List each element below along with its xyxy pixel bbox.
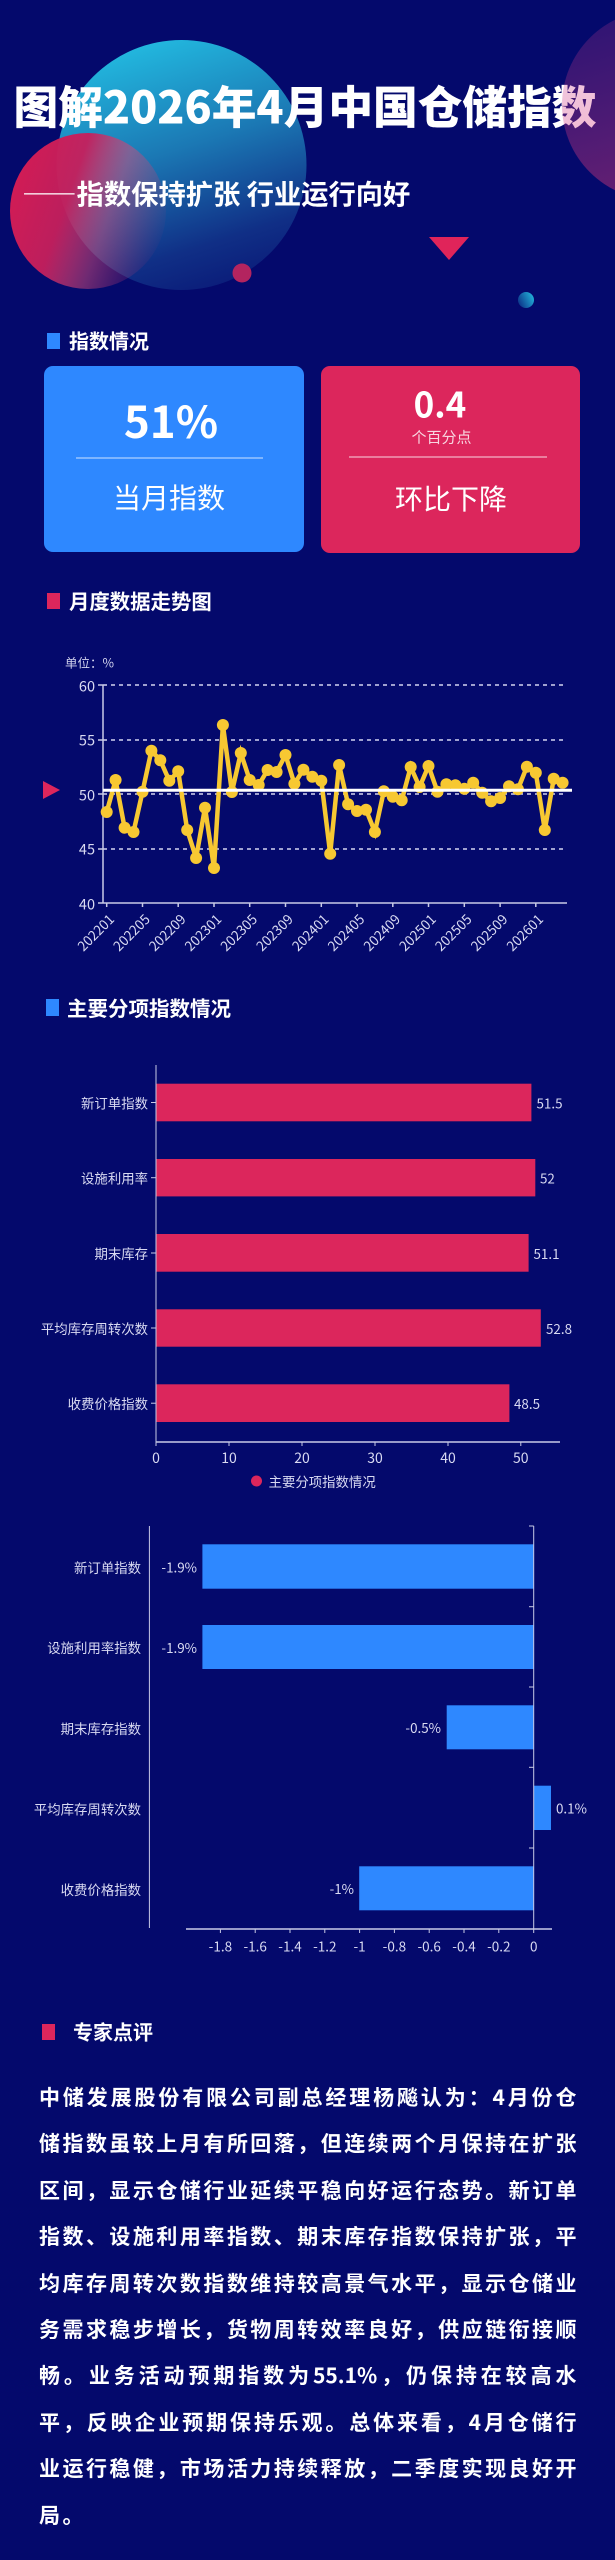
x axis labels: 10 [221,1448,237,1468]
value labels [161,1557,587,1898]
x axis labels: -1.8 [209,1936,232,1956]
text block: expert comment: 中储发展股份有限公司副总经理杨飚认为：4月份仓 [39,2082,576,2112]
x axis labels: 202401 [287,909,333,955]
x axis labels: 50 [513,1448,529,1468]
header decoration: large blue circle [56,40,306,290]
value labels [514,1092,572,1413]
x axis labels: 202601 [501,909,547,955]
card value: 51%: 51% [124,387,218,451]
bars [156,1084,541,1422]
category labels: 平均库存周转次数 [41,1318,149,1338]
card value: 0.4: 0.4 [414,378,466,428]
section heading: index overview: 指数情况 [69,326,149,354]
line chart: monthly index trend [43,652,572,955]
value labels: 51.5 [536,1092,563,1112]
value labels: -0.5% [405,1717,441,1737]
text block: expert comment: 均库存周转次数指数维持较高景气水平，显示仓储业 [39,2268,576,2298]
value labels: -1.9% [161,1637,197,1657]
text block: expert comment: 储指数虽较上月有所回落，但连续两个月保持在扩张 [39,2128,576,2158]
x axis labels: 202505 [430,909,476,955]
value labels: -1% [330,1878,354,1898]
x axis labels: 202405 [322,909,368,955]
data points [101,719,569,874]
header decoration: purple circle at right edge [562,10,615,200]
x axis labels: 30 [367,1448,383,1468]
card: current month index [44,366,304,552]
text block: expert comment: 平，反映企业预期保持乐观。总体来看，4月仓储行 [39,2407,576,2437]
card label: month on month decline: 环比下降 [395,478,507,518]
y axis labels: 40 [79,894,95,914]
x axis labels: -1.6 [243,1936,267,1956]
y axis labels: 60 [79,676,95,696]
x axis labels: -1.2 [313,1936,337,1956]
x axis labels: -0.6 [417,1936,441,1956]
x axis labels: 202409 [358,909,404,955]
text block: expert comment: 局。 [39,2500,86,2530]
y axis labels: 45 [79,838,95,860]
legend: 主要分项指数情况 [269,1471,376,1491]
bar chart: month on month change of sub-indices [34,1526,587,1956]
arrow: red marker at reference line [43,781,60,799]
subtitle: ——指数保持扩张 行业运行向好 [22,172,410,212]
current level reference line [103,789,572,792]
category labels: 收费价格指数 [68,1393,149,1413]
chart unit: 单位：% [65,652,115,672]
y axis labels: 50 [79,784,95,806]
title: 图解2026年4月中国仓储指数 [14,72,597,136]
text block: expert comment [39,2082,576,2530]
x axis labels: 202301 [179,909,225,955]
x axis labels [209,1936,537,1956]
header decoration: red circle [10,133,166,289]
category labels: 收费价格指数 [61,1879,142,1899]
decoration: red triangle [429,237,469,260]
value labels: 51.1 [534,1243,560,1263]
category labels [41,1092,149,1413]
x axis labels: 202309 [251,909,297,955]
category labels [34,1557,142,1899]
category labels: 期末库存 [94,1243,148,1263]
x axis labels: 0 [152,1448,160,1468]
value labels: -1.9% [161,1557,197,1577]
section heading: main sub-indices: 主要分项指数情况 [67,992,231,1022]
x axis labels: 0 [530,1936,537,1956]
value labels: 52.8 [546,1318,572,1338]
decoration: small red dot [232,264,252,282]
data line [107,725,563,868]
x axis labels [72,909,547,955]
x axis labels: 40 [440,1448,456,1468]
card unit: percentage points: 个百分点 [411,426,472,448]
card label: current month index: 当月指数 [113,477,225,517]
category labels: 新订单指数 [81,1092,149,1112]
y axis labels [79,676,95,914]
x axis labels: 202509 [465,909,511,955]
x axis labels: -0.2 [487,1936,511,1956]
decoration: small teal dot [518,292,534,308]
x axis labels: -0.4 [452,1936,476,1956]
x axis labels: -0.8 [383,1936,406,1956]
x axis labels: -1.4 [278,1936,302,1956]
y axis labels: 55 [79,730,95,750]
x axis labels: 202501 [394,909,440,955]
x axis labels: 20 [294,1448,310,1468]
text block: expert comment: 务需求稳步增长，货物周转效率良好，供应链衔接顺 [39,2314,576,2344]
x axis labels: 202305 [215,909,261,955]
category labels: 期末库存指数 [61,1718,142,1738]
text block: expert comment: 区间，显示仓储行业延续平稳向好运行态势。新订单 [39,2175,576,2205]
bar chart: main sub-indices [41,1065,572,1491]
category labels: 平均库存周转次数 [34,1798,142,1818]
x axis labels: -1 [354,1936,366,1956]
card: month on month decline [321,366,580,553]
value labels: 0.1% [556,1798,587,1818]
x axis labels [152,1448,529,1468]
category labels: 设施利用率指数 [47,1637,142,1657]
text block: expert comment: 畅。业务活动预期指数为55.1%，仍保持在较高水 [39,2360,576,2390]
text block: expert comment: 指数、设施利用率指数、期末库存指数保持扩张，平 [39,2221,576,2251]
category labels: 设施利用率 [81,1168,148,1188]
section heading: expert comment: 专家点评 [73,2016,153,2046]
value labels: 52 [540,1168,555,1188]
section heading: monthly trend: 月度数据走势图 [69,585,212,615]
text block: expert comment: 业运行稳健，市场活力持续释放，二季度实现良好开 [39,2453,576,2483]
x axis labels: 202205 [108,909,154,955]
x axis labels: 202209 [144,909,189,955]
bars [202,1544,551,1910]
value labels: 48.5 [514,1393,540,1413]
category labels: 新订单指数 [74,1557,142,1577]
x axis labels: 202201 [72,909,118,955]
